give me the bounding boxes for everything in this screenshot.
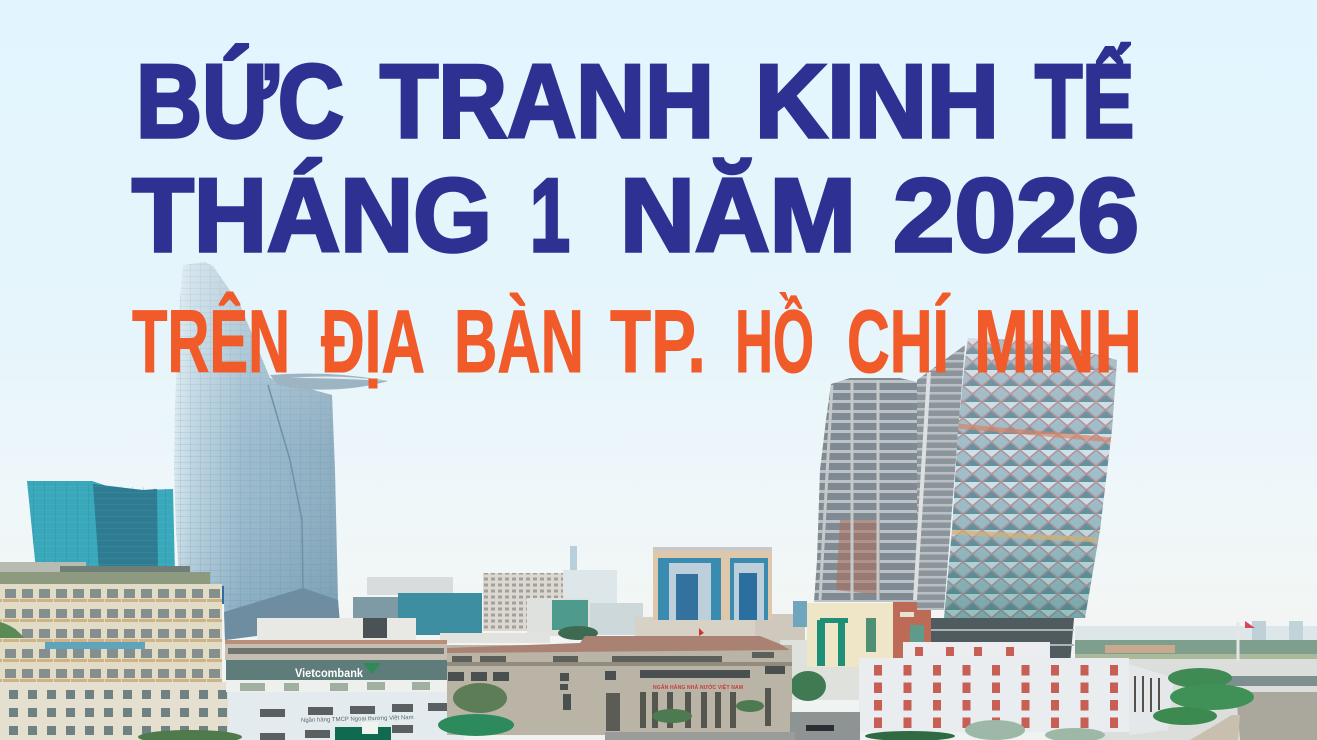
mid-ground city blocks bbox=[257, 546, 807, 656]
bank name text: Ngân hàng TMCP Ngoại thương Việt Nam bbox=[301, 715, 414, 724]
title word: TRANH: TRANH bbox=[380, 44, 714, 160]
building: low-rise office and red annex bbox=[780, 602, 931, 701]
helipad deck bbox=[270, 373, 388, 390]
title word: TẾ: TẾ bbox=[1035, 44, 1134, 160]
title bbox=[132, 44, 1139, 274]
title word: THÁNG: THÁNG bbox=[132, 158, 492, 274]
building: State Bank bbox=[447, 628, 792, 735]
building: Vietcombank bbox=[225, 640, 464, 740]
building: white and red riverside block bbox=[859, 642, 1174, 735]
subtitle word: MINH: MINH bbox=[974, 291, 1142, 391]
building: beige apartment block bbox=[0, 562, 228, 740]
building: unfinished concrete tower bbox=[814, 345, 965, 610]
subtitle word: CHÍ: CHÍ bbox=[847, 291, 951, 391]
subtitle word: BÀN: BÀN bbox=[454, 291, 584, 391]
building: blue and beige office block bbox=[653, 547, 772, 620]
building: diamond-facade tower bbox=[931, 335, 1120, 665]
title word: 2026: 2026 bbox=[893, 158, 1139, 274]
building: teal glass tower bbox=[27, 481, 175, 575]
subtitle word: TP.: TP. bbox=[610, 291, 706, 391]
tower podium bbox=[931, 618, 1074, 665]
subtitle word: TRÊN: TRÊN bbox=[132, 291, 290, 391]
title word: NĂM: NĂM bbox=[620, 158, 856, 274]
logo mark bbox=[363, 663, 381, 674]
title word: KINH: KINH bbox=[755, 44, 999, 160]
distant skyline and river bank bbox=[1075, 621, 1317, 740]
building: Bitexco tower bbox=[174, 262, 388, 640]
title word: BỨC: BỨC bbox=[136, 44, 344, 160]
street and foreground trees bbox=[138, 668, 1254, 740]
Vietcombank sign: Vietcombank bbox=[295, 666, 363, 680]
state bank facade text: NGÂN HÀNG NHÀ NƯỚC VIỆT NAM bbox=[653, 683, 743, 691]
title word: 1: 1 bbox=[530, 158, 570, 274]
subtitle bbox=[132, 291, 1142, 391]
subtitle word: ĐỊA: ĐỊA bbox=[321, 291, 425, 391]
subtitle word: HỒ: HỒ bbox=[735, 291, 814, 391]
